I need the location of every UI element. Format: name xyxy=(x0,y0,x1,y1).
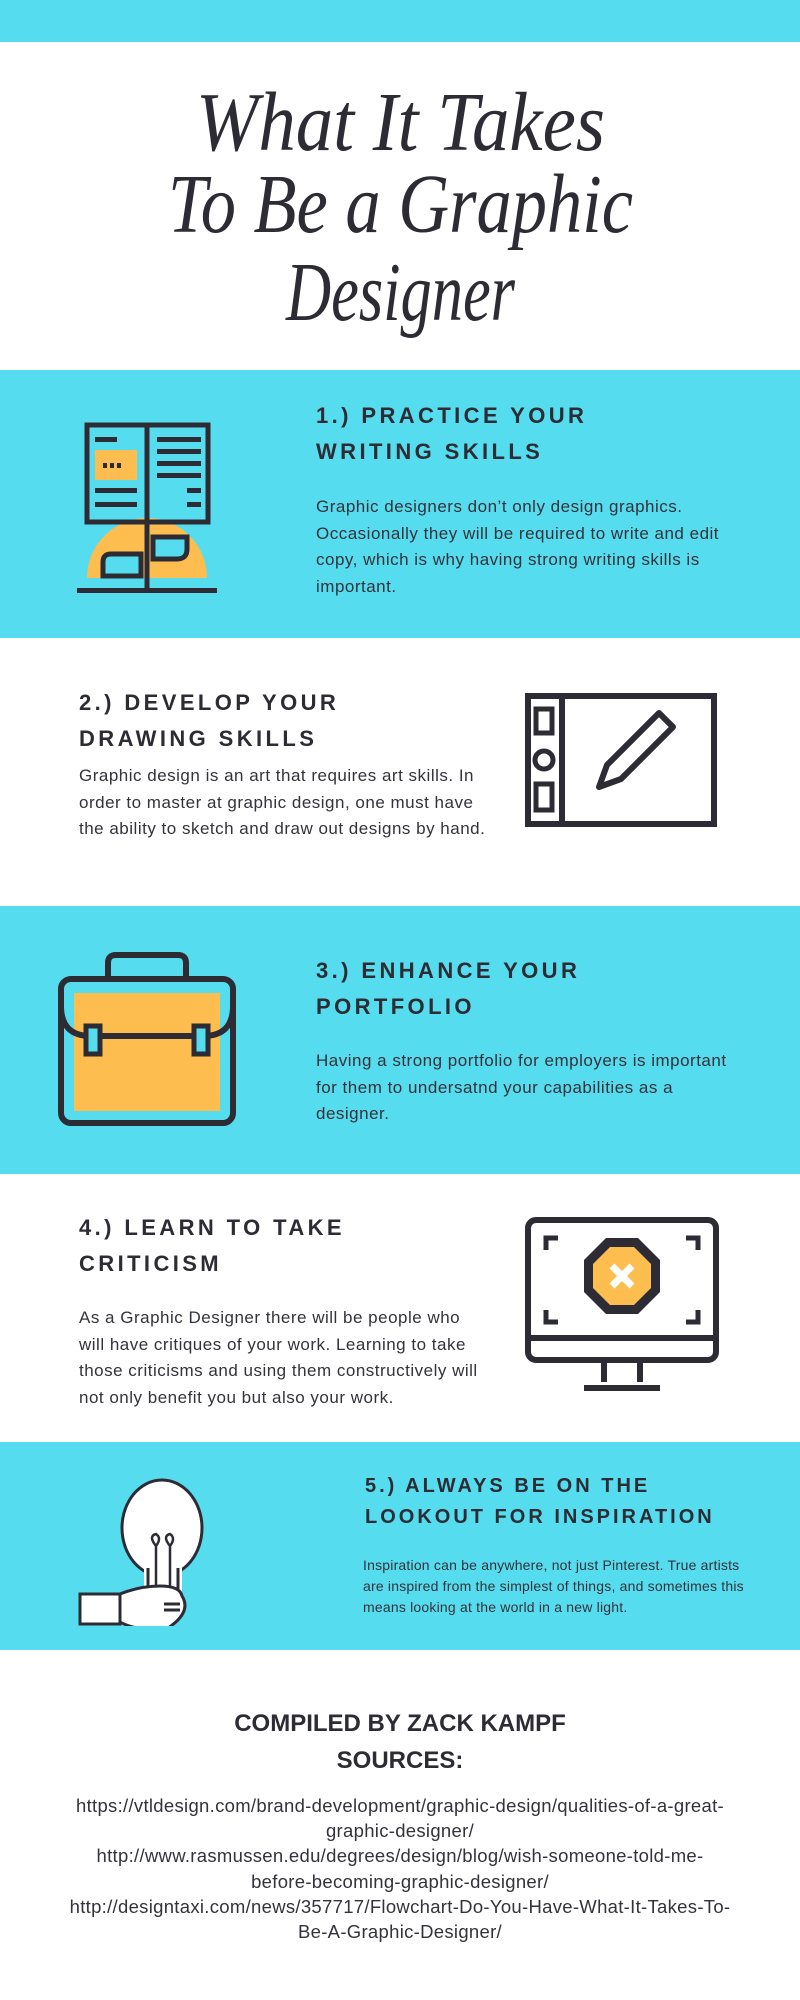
text 2 xyxy=(79,766,485,838)
icon: hand with light bulb xyxy=(78,1478,204,1626)
title: To Be a Graphic xyxy=(168,158,633,251)
heading 1: WRITING SKILLS xyxy=(316,439,543,464)
text 3: for them to undersatnd your capabilities as a xyxy=(316,1078,673,1096)
heading 1: 1.) PRACTICE YOUR xyxy=(316,403,587,428)
sources list xyxy=(70,1795,730,1942)
top bar xyxy=(0,0,800,42)
heading 5: LOOKOUT FOR INSPIRATION xyxy=(365,1506,715,1528)
text 4: will have critiques of your work. Learning to take xyxy=(79,1334,466,1354)
compiled by heading xyxy=(234,1710,566,1774)
panel 3 xyxy=(0,906,800,1174)
icon: tablet xyxy=(525,693,717,827)
sources list: graphic-designer/ xyxy=(326,1820,474,1841)
text 5: are inspired from the simplest of things, and sometimes this xyxy=(363,1578,744,1594)
panel 2 xyxy=(79,690,717,838)
icon: monitor xyxy=(525,1217,719,1391)
sources list: http://www.rasmussen.edu/degrees/design/blog/wish-someone-told-me- xyxy=(97,1845,703,1866)
sources list: before-becoming-graphic-designer/ xyxy=(251,1871,549,1892)
heading 2 xyxy=(79,690,339,751)
heading 2: 2.) DEVELOP YOUR xyxy=(79,690,339,715)
icon: book plant xyxy=(77,422,217,593)
text 4: those criticisms and using them constructively will xyxy=(79,1361,478,1380)
icon: briefcase xyxy=(58,952,236,1126)
heading 3 xyxy=(316,958,580,1019)
heading 3: 3.) ENHANCE YOUR xyxy=(316,958,580,983)
sources list: Be-A-Graphic-Designer/ xyxy=(298,1921,502,1942)
text 3 xyxy=(316,1051,727,1123)
panel 5 xyxy=(0,1442,800,1650)
heading 2: DRAWING SKILLS xyxy=(79,726,317,751)
title xyxy=(168,76,633,339)
text 2: Graphic design is an art that requires art skills. In xyxy=(79,766,474,785)
text 1 xyxy=(316,497,719,596)
text 3: Having a strong portfolio for employers is important xyxy=(316,1051,727,1070)
sources list: http://designtaxi.com/news/357717/Flowchart-Do-You-Have-What-It-Takes-To- xyxy=(70,1896,730,1917)
text 1: important. xyxy=(316,576,397,596)
heading 5: 5.) ALWAYS BE ON THE xyxy=(365,1475,650,1497)
heading 4: CRITICISM xyxy=(79,1251,222,1276)
text 2: the ability to sketch and draw out designs by hand. xyxy=(79,819,485,838)
text 4: not only benefit you but also your work. xyxy=(79,1388,394,1406)
text 4: As a Graphic Designer there will be people who xyxy=(79,1308,460,1327)
text 2: order to master at graphic design, one must have xyxy=(79,792,473,812)
panel 4 xyxy=(79,1215,719,1406)
text 1: Occasionally they will be required to write and edit xyxy=(316,524,719,542)
text 5 xyxy=(363,1557,744,1615)
footer credits xyxy=(70,1710,730,1942)
text 3: designer. xyxy=(316,1104,390,1123)
heading 4 xyxy=(79,1215,345,1276)
text 1: Graphic designers don’t only design graphics. xyxy=(316,497,682,516)
heading 4: 4.) LEARN TO TAKE xyxy=(79,1215,345,1240)
text 5: Inspiration can be anywhere, not just Pinterest. True artists xyxy=(363,1557,739,1573)
text 4 xyxy=(79,1308,478,1406)
title: What It Takes xyxy=(196,76,605,169)
heading 5 xyxy=(365,1475,715,1528)
sources list: https://vtldesign.com/brand-development/graphic-design/qualities-of-a-great- xyxy=(76,1795,724,1816)
heading 3: PORTFOLIO xyxy=(316,994,475,1019)
panel 1 xyxy=(0,370,800,638)
compiled by heading: COMPILED BY ZACK KAMPF xyxy=(234,1710,566,1737)
compiled by heading: SOURCES: xyxy=(337,1747,463,1774)
text 1: copy, which is why having strong writing skills is xyxy=(316,550,700,569)
title: Designer xyxy=(285,246,515,339)
heading 1 xyxy=(316,403,587,464)
text 5: means looking at the world in a new light. xyxy=(363,1599,627,1615)
